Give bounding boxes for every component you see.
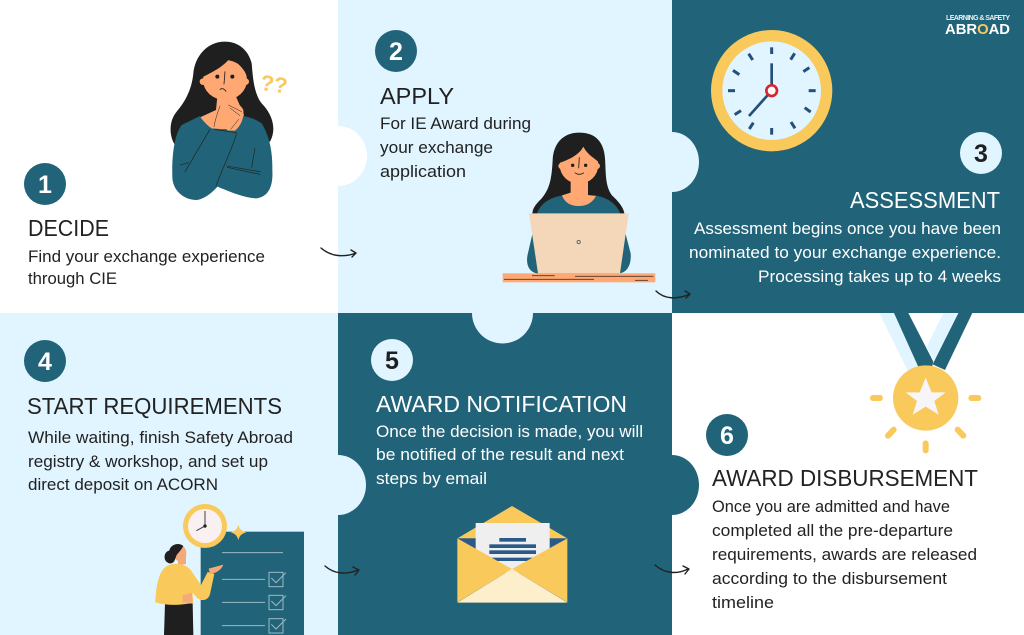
text: assessment description: Processing takes up to 4 weeks [758,267,1001,286]
number badge 6: 6 [720,422,734,450]
text: award disbursement description: completed all the pre-departure [712,521,953,540]
logo: learning and safety abroad: ABROAD [945,21,1010,38]
illustration: thinking woman [171,42,289,200]
heading: start requirements: START REQUIREMENTS [27,393,282,419]
text: assessment description [689,219,1001,286]
text: award notification description: steps by email [376,469,487,488]
icon: medal [873,313,978,450]
panel 3: assessment [672,0,1024,313]
text: apply description [380,114,531,181]
arrow: to step 3 [656,291,690,298]
text: start requirements description: While waiting, finish Safety Abroad [28,428,293,447]
text: apply description: your exchange [380,138,493,157]
panel 1: decide [0,0,367,313]
text: award disbursement description: Once you are admitted and have [712,497,950,516]
text: award disbursement description [712,497,977,612]
panel 2: apply [338,0,699,344]
heading: assessment: ASSESSMENT [850,187,1000,213]
illustration: woman with checklist and clock [155,504,304,635]
number badge 5: 5 [385,347,399,375]
text: decide description [28,247,265,288]
text: apply description: For IE Award during [380,114,531,133]
text: start requirements description: registry & workshop, and set up [28,452,268,471]
number badge 3: 3 [974,140,988,168]
text: start requirements description: direct deposit on ACORN [28,475,218,494]
illustration: woman at laptop [503,133,655,282]
text: award disbursement description: timeline [712,593,774,612]
text: assessment description: Assessment begins once you have been [694,219,1001,238]
heading: decide: DECIDE [28,215,109,241]
text: award disbursement description: according to the disbursement [712,569,947,588]
arrow: to step 5 [325,566,359,575]
panel 6: award disbursement [672,313,1024,635]
arrow: to step 2 [321,248,356,257]
logo: learning and safety abroad: LEARNING & SAFETY [946,15,1010,22]
number badge 5 [371,339,413,381]
number badge 2 [375,30,417,72]
number badge 1 [24,163,66,205]
panel 5: award notification [338,313,699,635]
heading: apply: APPLY [380,83,454,109]
text: decide description: through CIE [28,269,117,288]
arrow: to step 6 [655,565,689,574]
text: decide description: Find your exchange experience [28,247,265,266]
text: start requirements description [28,428,293,494]
heading: award disbursement: AWARD DISBURSEMENT [712,465,978,491]
icon: question marks: ?? [259,70,289,98]
number badge 1: 1 [38,171,52,199]
text: award disbursement description: requirements, awards are released [712,545,977,564]
number badge 4 [24,340,66,382]
panel 4: start requirements [0,313,366,635]
text: award notification description: be notified of the result and next [376,445,624,464]
text: award notification description [376,422,643,488]
text: award notification description: Once the decision is made, you will [376,422,643,441]
text: apply description: application [380,162,466,181]
icon: clock [711,30,832,151]
heading: award notification: AWARD NOTIFICATION [376,391,627,417]
number badge 4: 4 [38,348,52,376]
icon: envelope [457,506,567,603]
number badge 6 [706,414,748,456]
text: assessment description: nominated to your exchange experience. [689,243,1001,262]
number badge 2: 2 [389,38,403,66]
number badge 3 [960,132,1002,174]
